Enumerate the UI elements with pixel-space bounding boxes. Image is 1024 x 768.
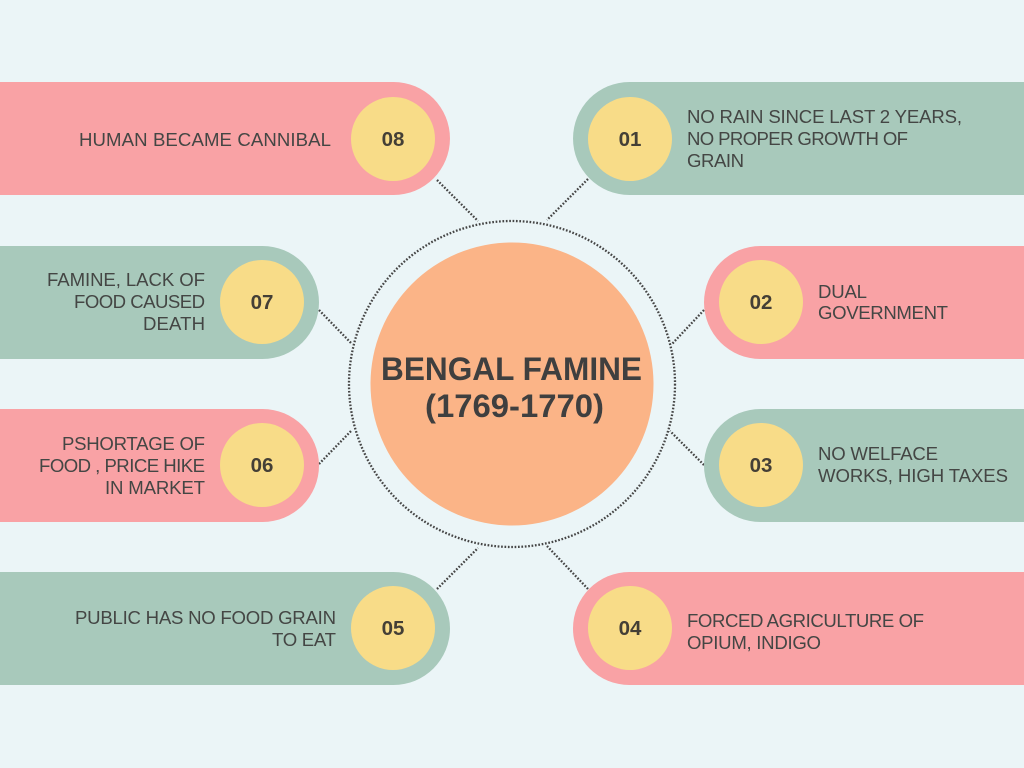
panel: item 08: HUMAN BECAME CANNIBAL	[79, 129, 331, 150]
panel: item 06	[0, 409, 319, 522]
panel: item 02: DUAL	[818, 281, 867, 302]
panel: item 07: DEATH	[143, 313, 205, 334]
panel: item 02: 02	[750, 291, 772, 314]
title: BENGAL FAMINE	[381, 351, 642, 387]
panel: item 02	[704, 246, 1024, 359]
panel: item 03: NO WELFACE	[818, 443, 938, 464]
panel: item 01	[573, 82, 1024, 195]
panel: item 05: PUBLIC HAS NO FOOD GRAIN	[75, 607, 336, 628]
panel: item 05: TO EAT	[272, 629, 336, 650]
panel: item 07	[0, 246, 319, 359]
central circle: title	[370, 242, 654, 526]
connector lines	[319, 179, 704, 589]
panel: item 05	[0, 572, 450, 685]
panel: item 04	[573, 572, 1024, 685]
panel: item 06: 06	[251, 454, 273, 477]
panel: item 02: GOVERNMENT	[818, 302, 948, 323]
panel: item 07: FAMINE, LACK OF	[47, 269, 205, 290]
panel: item 06: PSHORTAGE OF	[62, 433, 205, 454]
panel: item 01: 01	[619, 128, 641, 151]
panel: item 07: 07	[251, 291, 273, 314]
panel: item 06: FOOD , PRICE HIKE	[39, 455, 205, 476]
panel: item 08	[0, 82, 450, 195]
panel: item 03	[704, 409, 1024, 522]
panel: item 04: 04	[619, 617, 642, 640]
panel: item 01: NO PROPER GROWTH OF	[687, 128, 908, 149]
panel: item 03: 03	[750, 454, 772, 477]
panel: item 03: WORKS, HIGH TAXES	[818, 465, 1008, 486]
panel: item 04: OPIUM, INDIGO	[687, 632, 821, 653]
panel: item 01: NO RAIN SINCE LAST 2 YEARS,	[687, 106, 962, 127]
panel: item 05: 05	[382, 617, 404, 640]
panel: item 04: FORCED AGRICULTURE OF	[687, 610, 924, 631]
panel: item 06: IN MARKET	[105, 477, 205, 498]
title dates: (1769-1770)	[425, 388, 604, 424]
panel: item 07: FOOD CAUSED	[74, 291, 205, 312]
dotted ring	[349, 221, 675, 547]
panel: item 08: 08	[382, 128, 404, 151]
panel: item 01: GRAIN	[687, 150, 744, 171]
